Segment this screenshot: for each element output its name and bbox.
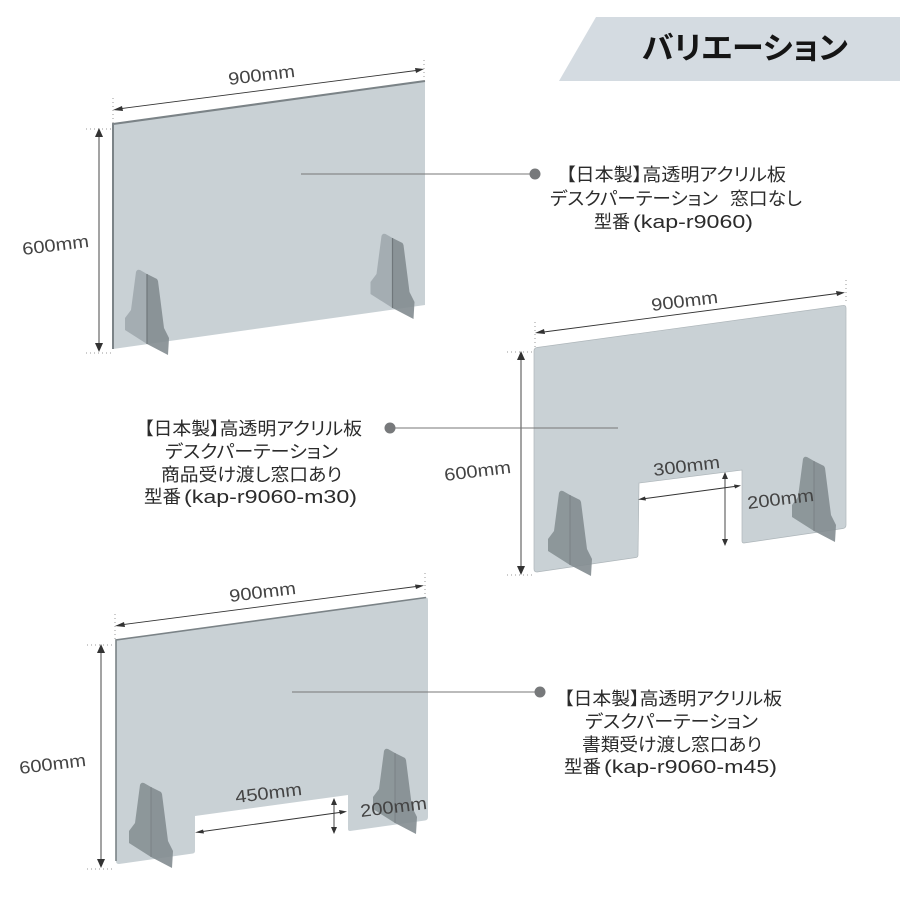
width dimension: 900mm [650, 287, 719, 315]
left foot [129, 783, 173, 868]
caption 1 [550, 165, 802, 232]
width dimension: 900mm [227, 61, 296, 89]
leader line 1 [301, 168, 540, 180]
height dimension [18, 644, 115, 869]
caption 2: 商品受け渡し窓口あり [161, 465, 342, 485]
caption 2: デスクパーテーション [165, 442, 338, 462]
width dimension: 900mm [228, 578, 297, 606]
caption 2: (kap-r9060-m30) [184, 487, 357, 507]
caption 3: 書類受け渡し窓口あり [582, 735, 762, 755]
caption 1: (kap-r9060) [633, 212, 753, 232]
window height dimension [722, 472, 815, 546]
height dimension: 600mm [21, 231, 90, 259]
caption 1: 【日本製】高透明アクリル板 [566, 165, 786, 185]
caption 1: 窓口なし [730, 189, 802, 209]
leader line 3 [292, 686, 546, 698]
caption 3: 【日本製】高透明アクリル板 [564, 689, 782, 709]
window width dimension [638, 452, 741, 500]
acrylic board [534, 305, 846, 572]
height dimension [21, 128, 112, 353]
width dimension [113, 60, 424, 124]
height dimension: 600mm [443, 457, 512, 485]
panel: 450mm window partition [18, 573, 428, 869]
window height dimension: 200mm [359, 793, 428, 821]
window height dimension: 200mm [746, 485, 815, 513]
caption 3: デスクパーテーション [585, 712, 758, 732]
panel: 300mm window partition [443, 280, 846, 576]
left foot [548, 491, 592, 576]
title banner: バリエーション [642, 31, 848, 66]
board edge [116, 598, 426, 861]
window height dimension [331, 793, 428, 834]
height dimension [443, 351, 533, 575]
acrylic board [113, 81, 425, 349]
width dimension [535, 280, 846, 347]
panel: no window partition [21, 60, 425, 355]
window width dimension: 450mm [234, 779, 303, 807]
caption 3: (kap-r9060-m45) [604, 757, 777, 777]
caption 1: デスクパーテーション [550, 189, 718, 209]
board edges [113, 81, 425, 349]
height dimension: 600mm [18, 750, 87, 778]
caption 3 [564, 689, 782, 777]
caption 3: 型番 [564, 757, 601, 777]
width dimension [115, 573, 425, 640]
caption 1: 型番 [594, 212, 630, 232]
leader line 2 [384, 422, 618, 434]
right foot [370, 234, 414, 319]
caption 2 [144, 419, 362, 507]
caption 2: 型番 [144, 487, 181, 507]
caption 2: 【日本製】高透明アクリル板 [144, 419, 362, 439]
right foot [792, 457, 836, 542]
window width dimension: 300mm [652, 452, 721, 480]
window width dimension [195, 779, 347, 834]
acrylic board [116, 597, 428, 864]
left foot [125, 270, 169, 355]
right foot [373, 749, 417, 834]
title banner [559, 17, 900, 81]
